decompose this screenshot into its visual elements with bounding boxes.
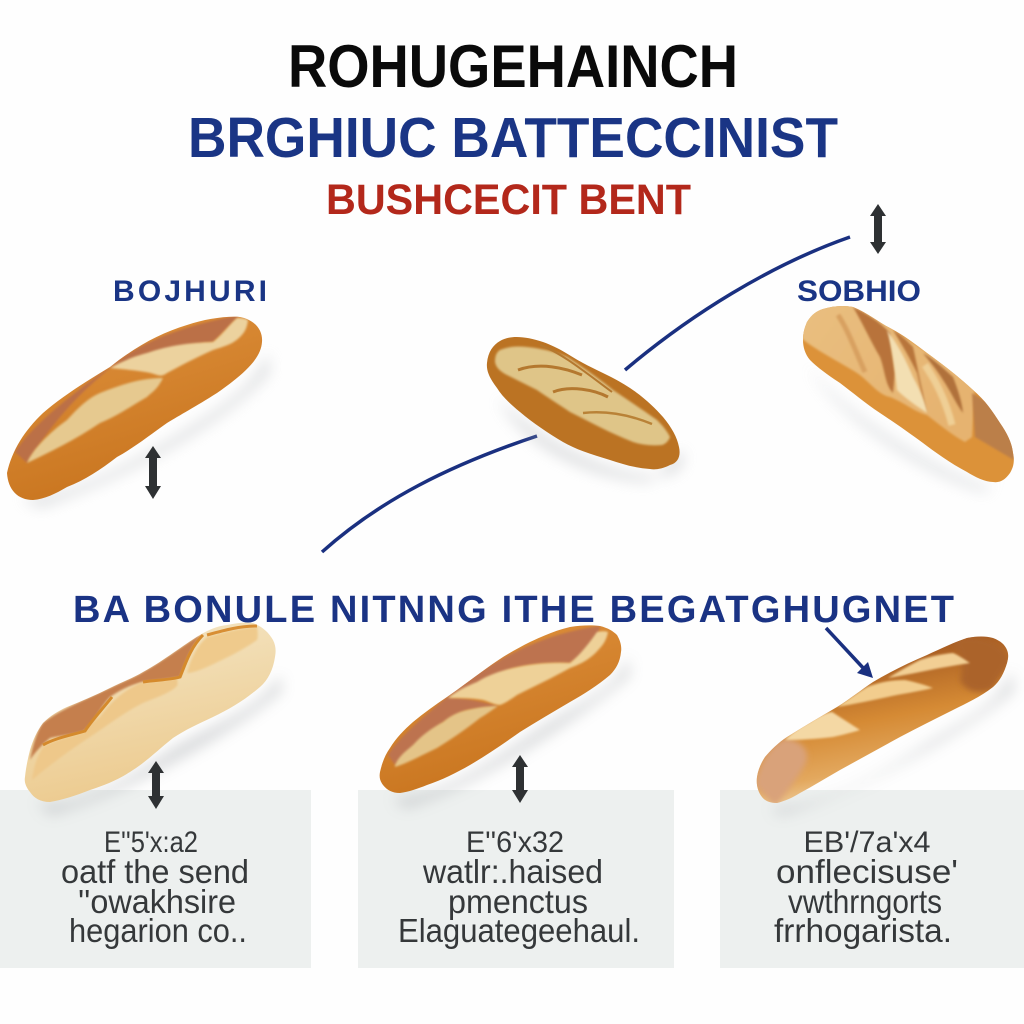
- caption: center text: pmenctus: [448, 883, 588, 920]
- title line 2: BRGHIUC BATTECCINIST: [188, 106, 838, 170]
- panel: right caption: [720, 790, 1024, 968]
- title line 3: BUSHCECIT BENT: [326, 176, 691, 224]
- caption: center text: E''6'x32: [466, 826, 564, 859]
- loaf: bottom left: [25, 623, 282, 815]
- label: left loaf: BOJHURI: [113, 275, 267, 308]
- caption: left text: hegarion co..: [69, 912, 247, 949]
- caption: right text: EB'/7a'x4: [804, 826, 930, 859]
- loaf: center: [487, 337, 683, 482]
- double arrow: bottom center loaf: [512, 755, 528, 803]
- caption: left text: ''owakhsire: [78, 883, 236, 920]
- panel: center caption: [358, 790, 674, 968]
- label: right loaf: SOBHIO: [797, 275, 921, 308]
- loaf: top right: [800, 300, 1016, 492]
- double arrow: left loaf: [145, 446, 161, 499]
- caption: right text: onflecisuse': [776, 853, 958, 890]
- loaf: bottom right: [755, 636, 1014, 815]
- caption: left text: oatf the send: [61, 853, 249, 890]
- caption: center text: [398, 826, 640, 949]
- caption: left text: [61, 826, 249, 949]
- caption: right text: [774, 826, 958, 949]
- panel: left caption: [0, 790, 311, 968]
- caption: center text: Elaguategeehaul.: [398, 912, 640, 949]
- title line 1: ROHUGEHAINCH: [288, 33, 738, 100]
- double arrow: bottom left loaf: [148, 761, 164, 809]
- arrow: pointer to bottom right loaf: [826, 628, 873, 678]
- caption: center text: watlr:.haised: [422, 853, 603, 890]
- curved line: lower connector: [322, 436, 537, 552]
- caption: right text: vwthrngorts: [788, 883, 942, 920]
- title: [188, 33, 838, 224]
- caption: left text: E''5'x:a2: [104, 826, 198, 859]
- curved line: upper connector: [625, 237, 850, 370]
- loaf: bottom center: [380, 625, 630, 808]
- caption: right text: frrhogarista.: [774, 912, 952, 949]
- loaf: top left: [7, 315, 270, 508]
- double arrow: top right: [870, 204, 886, 254]
- section heading: BA BONULE NITNNG ITHE BEGATGHUGNET: [73, 589, 954, 631]
